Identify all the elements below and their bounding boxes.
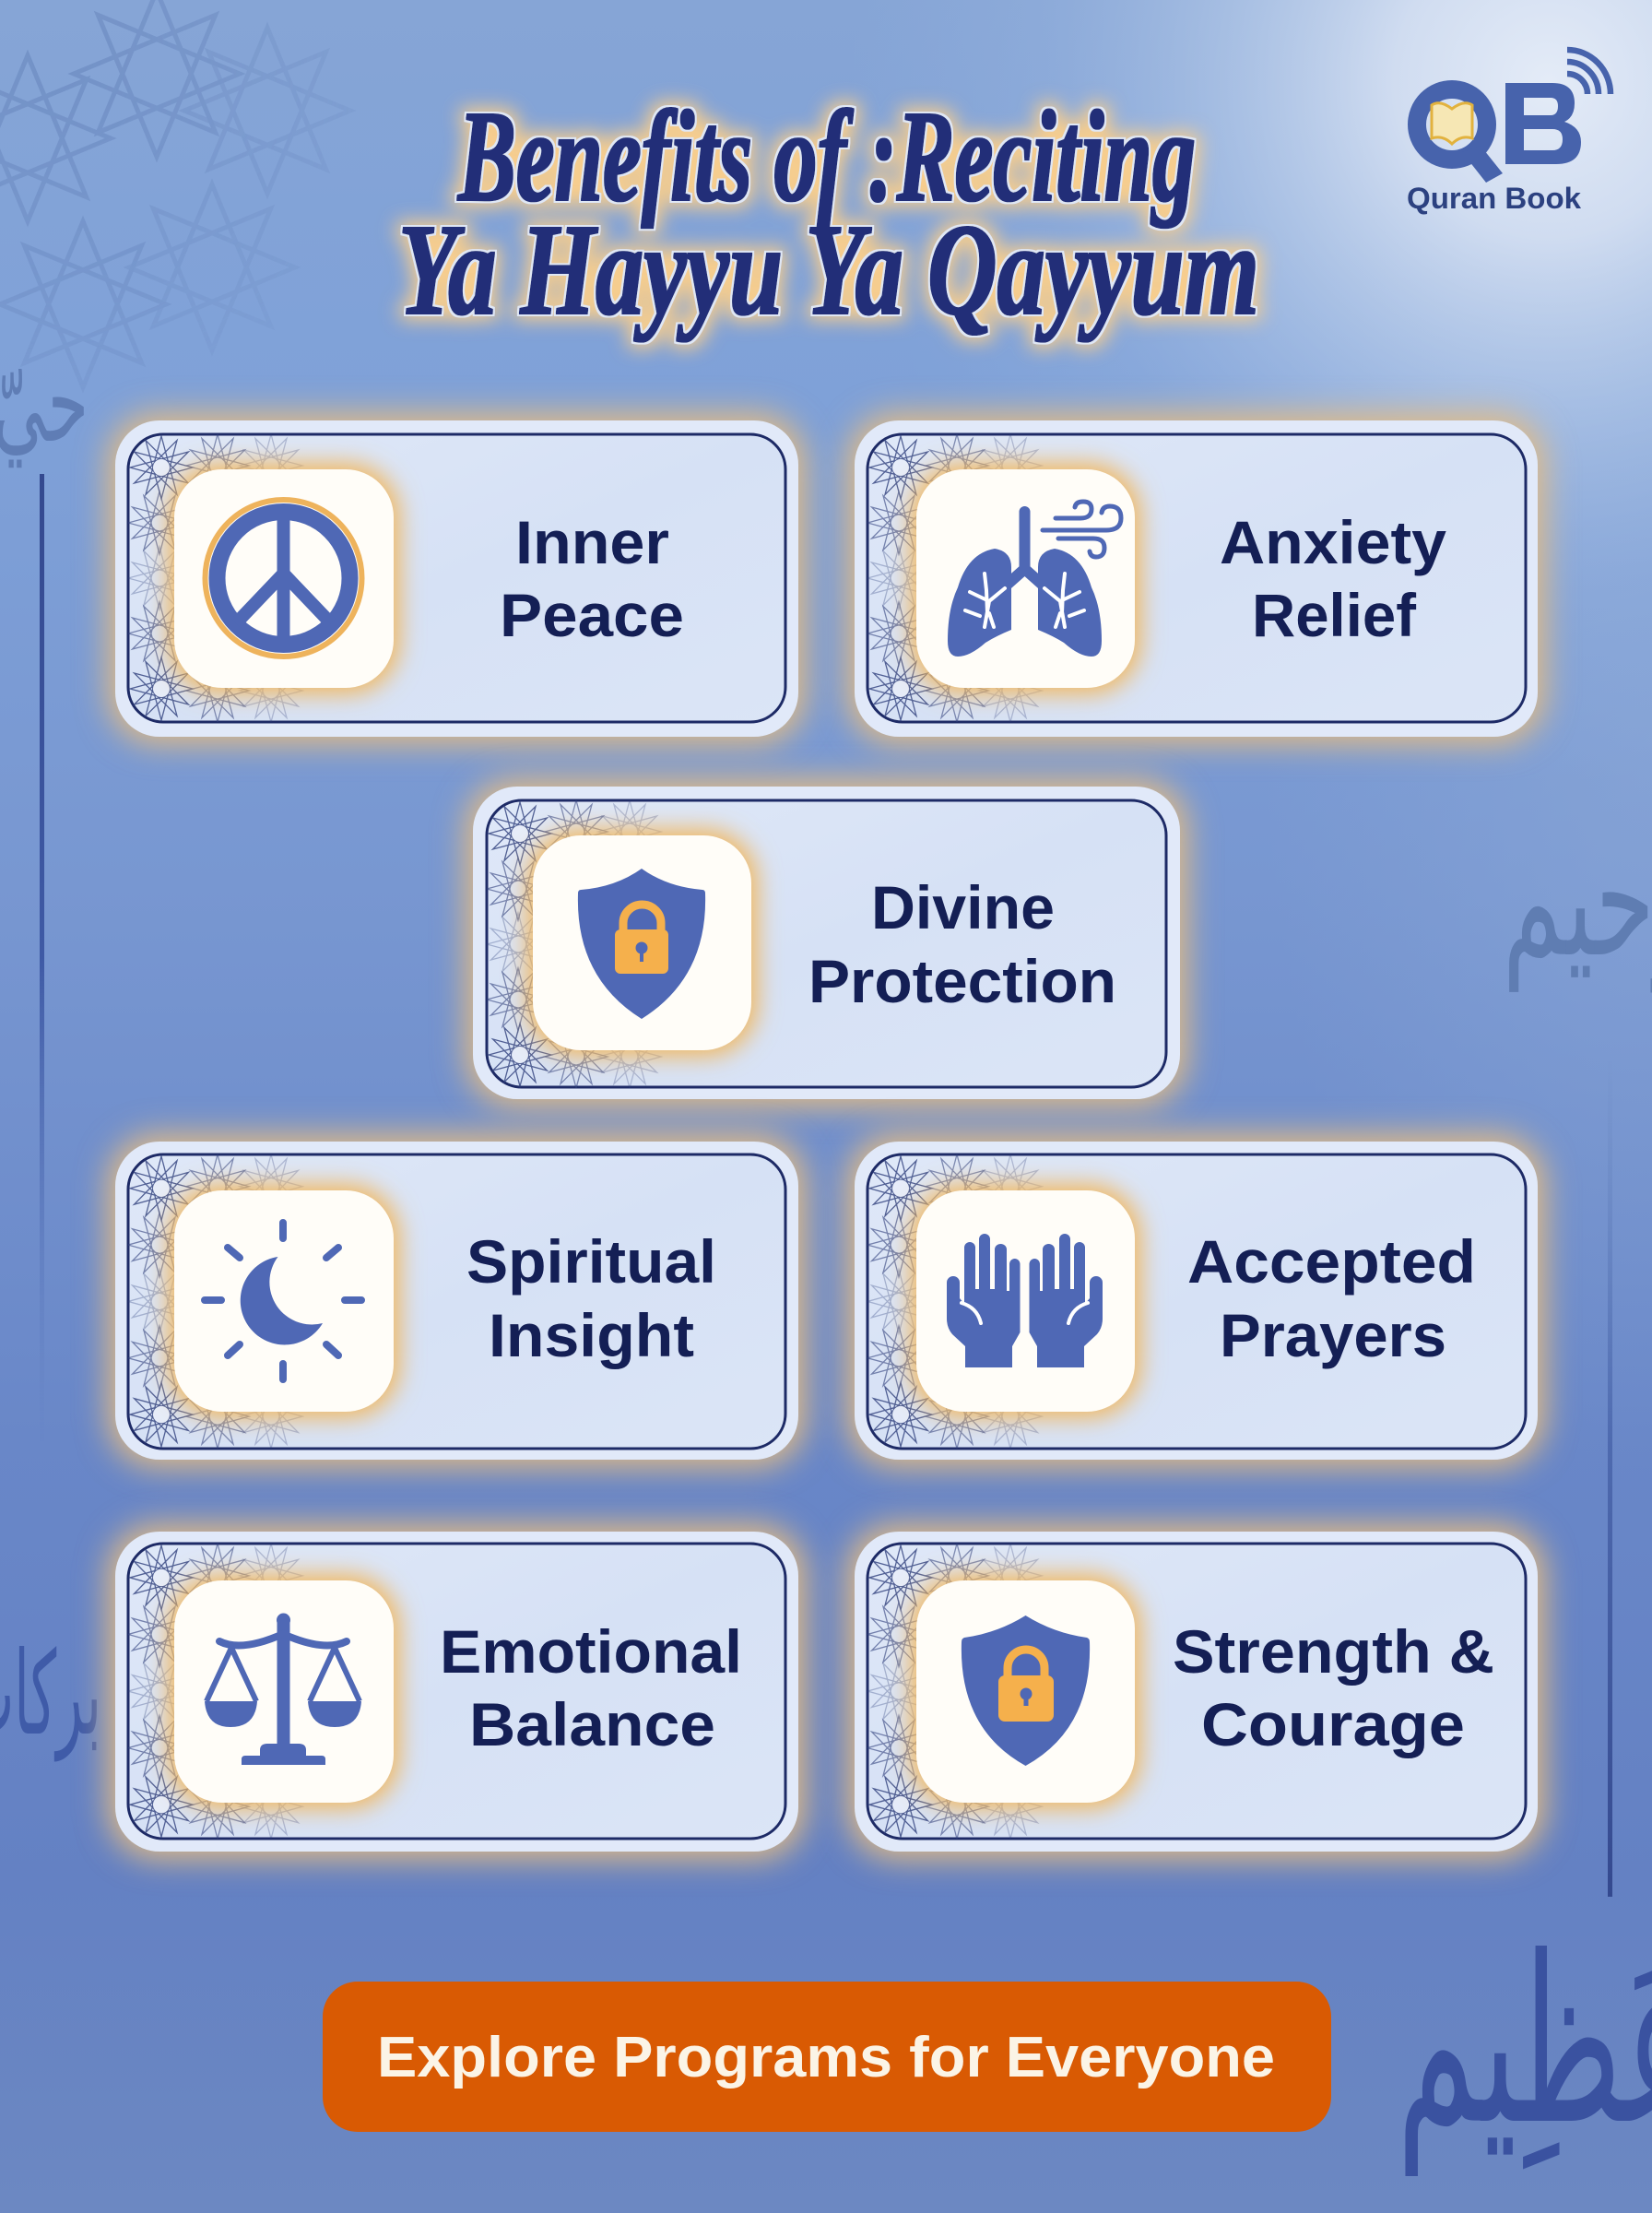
icon: shield with lock [962, 1615, 1090, 1766]
label: Prayers [1220, 1301, 1446, 1369]
label: Accepted [1187, 1227, 1476, 1296]
call to action button: Explore Programs for Everyone [377, 2026, 1275, 2089]
title [398, 83, 1259, 342]
label: Spiritual [466, 1227, 716, 1296]
label: Insight [489, 1301, 694, 1369]
icon: lungs [948, 502, 1121, 657]
icon: peace symbol [205, 500, 361, 657]
vertical line left [40, 474, 44, 1442]
panel: strength and courage [847, 1524, 1545, 1859]
label: Emotional [440, 1617, 742, 1686]
label: Relief [1252, 581, 1417, 649]
panel: accepted prayers [847, 1134, 1545, 1467]
icon: balance scales [205, 1614, 361, 1765]
label [1187, 1227, 1476, 1369]
title: Benefits of :Reciting [457, 83, 1196, 229]
label [1220, 508, 1446, 649]
label [440, 1617, 742, 1758]
title: Ya Hayyu Ya Qayyum [398, 196, 1259, 342]
label [500, 508, 684, 649]
label: Strength & [1173, 1617, 1494, 1686]
label: Anxiety [1220, 508, 1446, 576]
label: Balance [469, 1690, 715, 1758]
panel: anxiety relief [847, 413, 1545, 744]
icon: raised hands [947, 1234, 1103, 1367]
call to action button [323, 1982, 1331, 2132]
logo wordmark: Quran Book [1407, 182, 1581, 215]
label: Divine [871, 873, 1055, 941]
panel: spiritual insight [108, 1134, 806, 1467]
label: Inner [515, 508, 669, 576]
logo Q [1417, 89, 1503, 183]
icon: crescent and rays [205, 1223, 361, 1379]
logo book [1432, 103, 1472, 144]
panel: inner peace [108, 413, 806, 744]
geometric pattern top-left [0, 0, 304, 356]
logo signal arcs [1567, 50, 1611, 94]
logo B [1505, 83, 1581, 164]
panel: emotional balance [108, 1524, 806, 1859]
label [466, 1227, 716, 1369]
panel: divine protection [466, 779, 1187, 1106]
label [808, 873, 1116, 1015]
label: Protection [808, 947, 1116, 1015]
label: Courage [1201, 1690, 1465, 1758]
vertical line right [1608, 1060, 1612, 1897]
label [1173, 1617, 1494, 1758]
icon: shield with lock [578, 869, 705, 1019]
label: Peace [500, 581, 684, 649]
logo [1407, 50, 1611, 215]
